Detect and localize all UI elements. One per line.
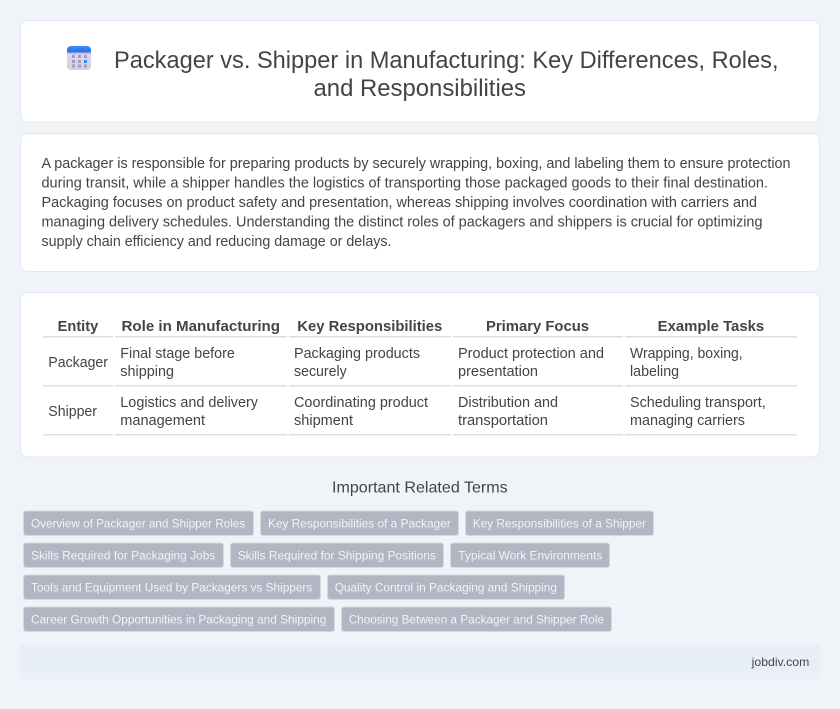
- table row: shipper: Logistics and delivery: [120, 395, 259, 411]
- panel: comparison table: [20, 292, 820, 457]
- tag: career growth: Career Growth Opportunities in Packaging and Shipping: [31, 612, 326, 626]
- table row: shipper: shipment: [294, 413, 353, 429]
- tag: tools and equipment: Tools and Equipment Used by Packagers vs Shippers: [31, 580, 312, 594]
- tag: shipper responsibilities: Key Responsibilities of a Shipper: [473, 516, 646, 530]
- title: Packager vs. Shipper in Manufacturing: Key Differences, Roles,: [114, 47, 778, 74]
- title: and Responsibilities: [314, 75, 526, 102]
- text block: introduction paragraph: supply chain efficiency and reducing damage or delays.: [42, 234, 392, 250]
- table row: packager: Packaging products: [294, 346, 420, 362]
- tag: quality control: Quality Control in Packaging and Shipping: [335, 580, 557, 594]
- table row: packager: labeling: [630, 364, 679, 380]
- text block: introduction paragraph: A packager is responsible for preparing products by securely wrapping, boxing, and labeling them to ensure protection: [42, 156, 790, 172]
- tag: packager responsibilities: [260, 511, 458, 536]
- tag: overview: Overview of Packager and Shipper Roles: [31, 516, 245, 530]
- table row: shipper: managing carriers: [630, 413, 745, 429]
- table header row: Example Tasks: [658, 319, 764, 335]
- text block: introduction paragraph: during transit, while a shipper handles the logistics of transporting those packaged goods to their final destination.: [42, 176, 768, 192]
- heading: important related terms: Important Related Terms: [332, 480, 508, 497]
- table row: packager: shipping: [120, 364, 174, 380]
- text block: introduction paragraph: Packaging focuses on product safety and presentation, whereas shipping involves coordination with carriers and: [42, 195, 757, 211]
- table row: packager: Packager: [48, 355, 108, 371]
- table row: packager: Product protection and: [458, 346, 604, 362]
- table row: shipper: Shipper: [48, 404, 97, 420]
- tag: packaging skills: Skills Required for Packaging Jobs: [31, 548, 215, 562]
- footer: jobdiv.com: [751, 655, 809, 669]
- title: [114, 47, 778, 102]
- table row: packager: Wrapping, boxing,: [630, 346, 743, 362]
- tag: packaging skills: [24, 543, 224, 568]
- table header row: Role in Manufacturing: [122, 319, 280, 335]
- text block: introduction paragraph: [42, 156, 790, 250]
- text block: introduction paragraph: managing delivery schedules. Understanding the distinct roles of packagers and shippers is crucial for optimizing: [42, 214, 762, 230]
- table row: packager: Final stage before: [120, 346, 235, 362]
- tag: tools and equipment: [24, 575, 320, 600]
- panel: title header: [20, 20, 820, 122]
- tag: overview: [24, 511, 254, 536]
- table row: shipper: Distribution and: [458, 395, 558, 411]
- table row: shipper: management: [120, 413, 205, 429]
- table row: packager: [48, 346, 743, 380]
- tag: quality control: [328, 575, 564, 600]
- footer: [20, 645, 820, 679]
- table row: shipper: Scheduling transport,: [630, 395, 766, 411]
- table row: shipper: Coordinating product: [294, 395, 428, 411]
- table header row: Key Responsibilities: [297, 319, 442, 335]
- table header row: [58, 319, 764, 335]
- icon: calendar: [67, 46, 91, 70]
- tag: shipping skills: Skills Required for Shipping Positions: [238, 548, 436, 562]
- tag: shipping skills: [230, 543, 444, 568]
- table header row: Primary Focus: [486, 319, 589, 335]
- tag: work environments: Typical Work Environments: [458, 548, 602, 562]
- table row: packager: presentation: [458, 364, 538, 380]
- related terms tags: [24, 511, 654, 632]
- tag: choosing a role: [342, 607, 612, 632]
- tag: career growth: [24, 607, 334, 632]
- tag: work environments: [450, 543, 610, 568]
- table row: packager: securely: [294, 364, 347, 380]
- table header row: Entity: [58, 319, 98, 335]
- panel: introduction: [20, 134, 820, 272]
- table row: shipper: [48, 395, 766, 429]
- table row: shipper: transportation: [458, 413, 548, 429]
- tag: shipper responsibilities: [466, 511, 654, 536]
- tag: choosing a role: Choosing Between a Packager and Shipper Role: [349, 612, 604, 626]
- tag: packager responsibilities: Key Responsibilities of a Packager: [268, 516, 451, 530]
